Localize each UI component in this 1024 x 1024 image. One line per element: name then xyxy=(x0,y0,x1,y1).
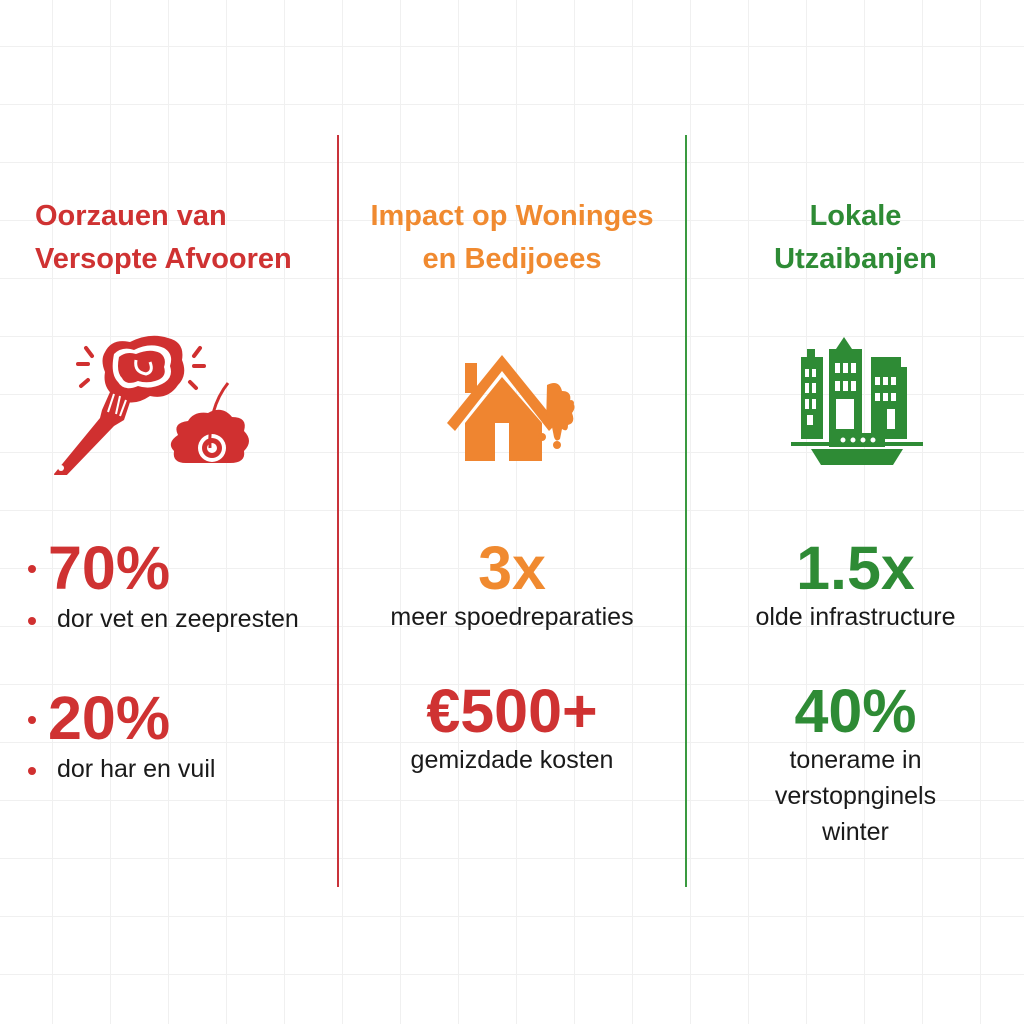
stat 40%: verstopnginels xyxy=(775,782,936,810)
heading: causes xyxy=(35,200,292,275)
stat 3x xyxy=(390,534,634,631)
divider red xyxy=(337,135,339,887)
stat 40% xyxy=(775,677,936,846)
divider green xyxy=(685,135,687,887)
stat 70%: 70% xyxy=(48,534,170,602)
stat 20%: 20% xyxy=(48,684,170,752)
stat 1.5x: olde infrastructure xyxy=(755,603,956,631)
heading: causes: Versopte Afvooren xyxy=(35,243,292,275)
stat 3x: 3x xyxy=(478,534,546,602)
stat 20%: dor har en vuil xyxy=(57,755,215,783)
stat 20% xyxy=(28,684,215,783)
heading: impact: en Bedijoees xyxy=(423,243,601,275)
heading: local xyxy=(774,200,937,275)
heading: local: Lokale xyxy=(810,200,901,232)
heading: impact: Impact op Woninges xyxy=(370,200,654,232)
stat 70% xyxy=(28,534,299,633)
stat €500+: gemizdade kosten xyxy=(411,746,613,774)
stat 1.5x xyxy=(755,534,956,631)
stat 70%: dor vet en zeepresten xyxy=(57,605,299,633)
stat 40%: winter xyxy=(822,818,889,846)
panel: causes xyxy=(28,200,299,783)
icon: house with leak xyxy=(447,355,575,461)
panel: impact xyxy=(370,200,654,774)
stat 3x: meer spoedreparaties xyxy=(390,603,634,631)
heading: local: Utzaibanjen xyxy=(774,243,937,275)
icon: meat, fork and hair xyxy=(54,336,249,475)
stat 1.5x: 1.5x xyxy=(796,534,915,602)
stat €500+ xyxy=(411,677,613,774)
stat €500+: €500+ xyxy=(426,677,598,745)
icon: canal houses and boat xyxy=(791,337,923,465)
stat 40%: tonerame in xyxy=(789,746,922,774)
stat 40%: 40% xyxy=(794,677,917,745)
heading: impact xyxy=(370,200,654,275)
heading: causes: Oorzauen van xyxy=(35,200,227,232)
panel: local xyxy=(755,200,956,846)
